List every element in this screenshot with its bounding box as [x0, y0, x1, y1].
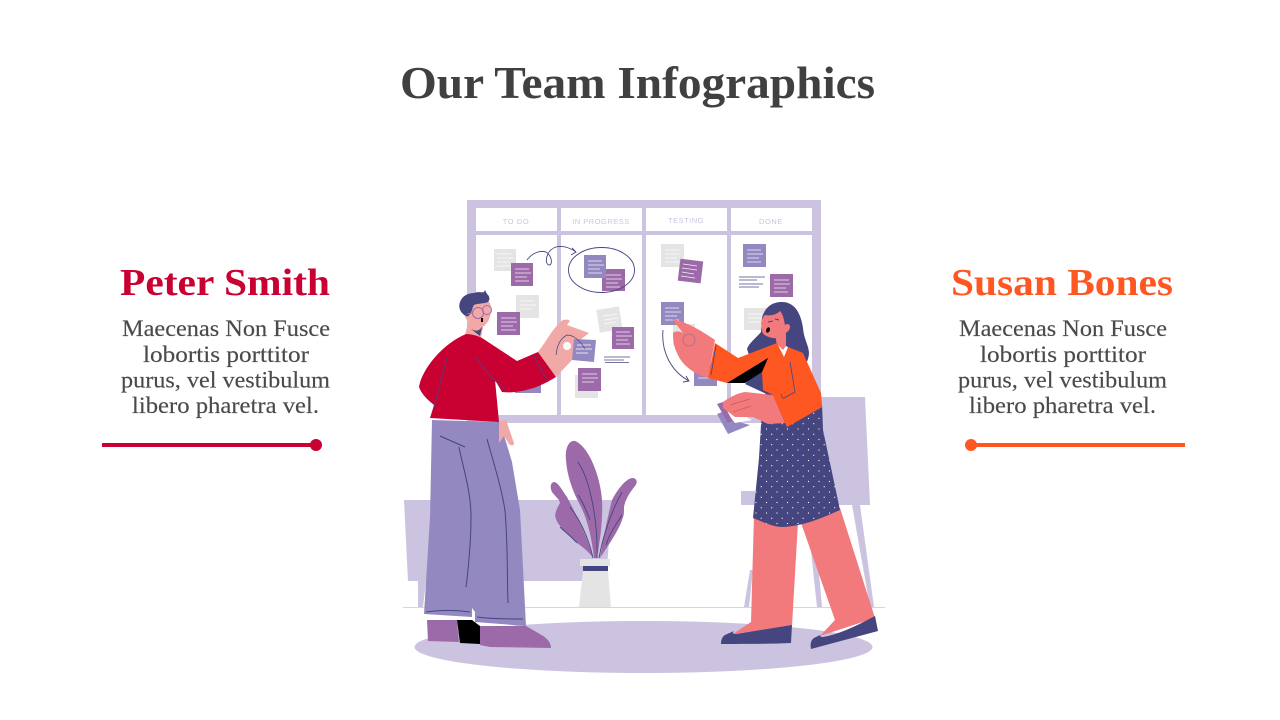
right leg: [800, 508, 875, 636]
column labels: DONE: [759, 217, 783, 226]
jacket folds: [711, 345, 795, 426]
accent line with dot: [965, 439, 1185, 451]
scribbled lines: [604, 277, 765, 362]
face: [464, 298, 491, 327]
lower jacket cuff: [773, 393, 822, 427]
arrows and circle on the board: [527, 246, 689, 382]
trousers: [424, 420, 526, 626]
right shoe: [480, 626, 551, 648]
person: man: [419, 290, 596, 648]
kanban board: [467, 200, 821, 423]
sweater: [419, 334, 556, 422]
text block: Susan description: purus, vel vestibulum: [958, 368, 1167, 394]
sweater folds: [434, 356, 548, 407]
clipboard: [717, 402, 752, 434]
trouser folds: [426, 436, 523, 619]
left hand below: [499, 420, 514, 445]
text block: Susan description: Maecenas Non Fusce: [959, 316, 1167, 342]
text block: Susan description: libero pharetra vel.: [969, 393, 1156, 419]
panel: Peter Smith: [102, 262, 330, 451]
text block: Susan description: [958, 316, 1167, 419]
text block: Peter description: lobortis porttitor: [143, 342, 309, 368]
neck: [465, 322, 484, 338]
note in hand: [572, 339, 596, 362]
illustration: team at kanban board: [403, 200, 885, 673]
table: [404, 500, 612, 607]
left leg: [733, 515, 798, 634]
sticky notes: [494, 244, 793, 398]
black lining: [727, 358, 768, 383]
floor line: [403, 607, 885, 608]
hair: [745, 302, 809, 398]
floor shadow: [414, 621, 872, 673]
plant: [551, 441, 637, 558]
column labels: TO DO: [503, 217, 529, 226]
text block: Peter description: libero pharetra vel.: [132, 393, 319, 419]
heading: Peter Smith: Peter Smith: [120, 262, 330, 304]
column labels: [503, 216, 783, 226]
finger lines: [730, 399, 751, 412]
text block: Susan description: lobortis porttitor: [980, 342, 1146, 368]
column labels: TESTING: [668, 216, 704, 225]
chair: [741, 397, 874, 607]
text block: Peter description: purus, vel vestibulum: [121, 368, 330, 394]
person: woman: [672, 302, 878, 649]
hair: [459, 290, 489, 316]
neck: [775, 332, 786, 354]
heading: Susan Bones: Susan Bones: [951, 262, 1173, 304]
vase: [579, 559, 611, 607]
sock: [457, 620, 480, 644]
jacket: [708, 343, 822, 427]
face: [761, 311, 790, 338]
title: Our Team Infographics: [400, 57, 875, 108]
accent line with dot: [102, 439, 322, 451]
eyes and mouth: [765, 319, 779, 333]
column labels: IN PROGRESS: [572, 217, 630, 226]
hand: [538, 320, 589, 377]
dress: [753, 392, 840, 527]
shoes: [721, 625, 792, 644]
text block: Peter description: Maecenas Non Fusce: [122, 316, 330, 342]
lower hand: [723, 392, 785, 424]
left shoe: [427, 620, 459, 642]
pointing hand: [672, 319, 715, 378]
collar shadow: [471, 327, 482, 336]
panel: Susan Bones: [951, 262, 1185, 451]
glasses: [467, 306, 492, 318]
collar: [772, 345, 788, 357]
text block: Peter description: [121, 316, 330, 419]
